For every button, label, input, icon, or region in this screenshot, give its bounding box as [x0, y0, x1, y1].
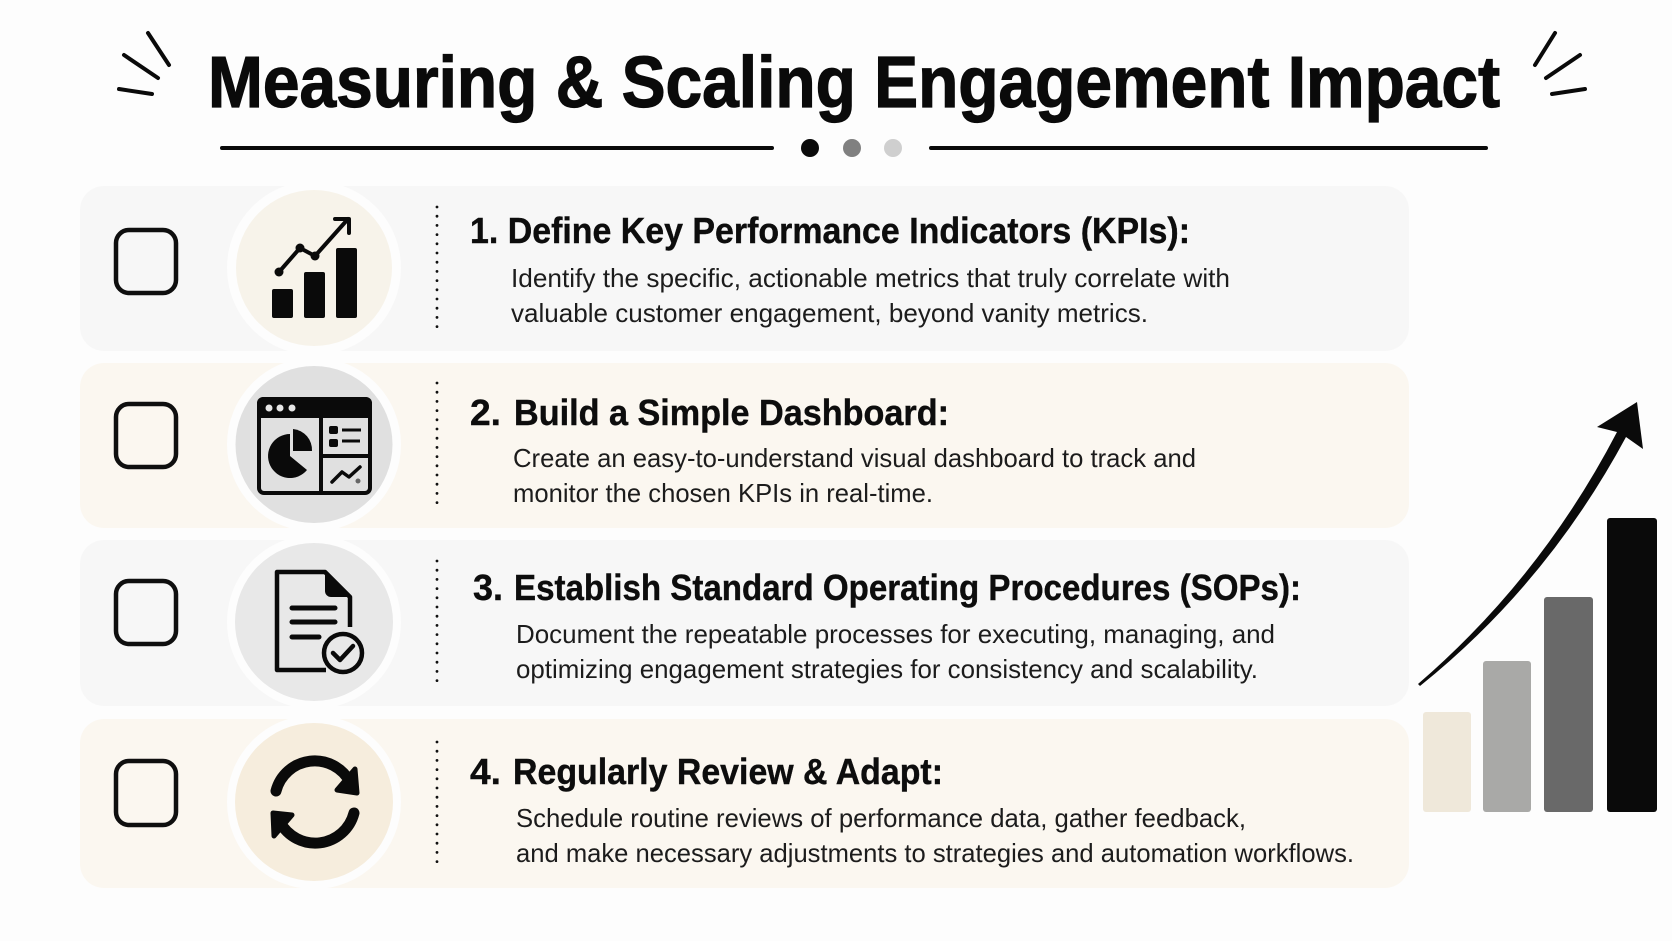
panel 3 icon: document with check: [227, 535, 401, 709]
panel 3 dotted separator: [436, 561, 438, 684]
panel 4 body: and make necessary adjustments to strategies and automation workflows.: [516, 838, 1354, 868]
panel 1 checkbox: [116, 230, 176, 293]
panel 2 body: Create an easy-to-understand visual dashboard to track and: [513, 443, 1196, 473]
panel 1 body: valuable customer engagement, beyond vanity metrics.: [511, 298, 1148, 328]
growth arrow: [1418, 402, 1643, 686]
panel 1 background: [80, 186, 1409, 351]
panel 4 icon: refresh arrows: [227, 715, 401, 889]
panel 3 body: Document the repeatable processes for executing, managing, and: [516, 619, 1275, 649]
title divider with dots: [220, 139, 1488, 157]
panel 2 body: [513, 443, 1196, 508]
panel 3 body: optimizing engagement strategies for consistency and scalability.: [516, 654, 1258, 684]
panel 4 heading: Regularly Review & Adapt:: [513, 751, 943, 792]
panel 1 body: [511, 263, 1230, 328]
panel 3: establish SOPs: [80, 535, 1409, 709]
panel 1 icon: bar chart with trend arrow: [227, 181, 401, 355]
left burst accent: [119, 33, 169, 94]
panel 3 heading: Establish Standard Operating Procedures (SOPs):: [514, 567, 1301, 608]
panel 1 dotted separator: [436, 207, 438, 331]
panel 4 checkbox: [116, 761, 176, 825]
panel 4 heading: 4.: [470, 751, 501, 792]
panel 2 body: monitor the chosen KPIs in real-time.: [513, 478, 933, 508]
panel 2 heading: Build a Simple Dashboard:: [514, 392, 949, 433]
panel 2: build dashboard: [80, 358, 1409, 532]
panel 2 icon: dashboard window: [227, 358, 401, 532]
panel 3 body: [516, 619, 1275, 684]
panel 2 checkbox: [116, 404, 176, 467]
growth chart: [1418, 402, 1657, 812]
right burst accent: [1535, 33, 1585, 94]
title: Measuring & Scaling Engagement Impact: [208, 43, 1500, 123]
growth bars: [1423, 518, 1657, 812]
panel 4: review and adapt: [80, 715, 1409, 889]
panel 4 background: [80, 719, 1409, 888]
panel 1: define KPIs: [80, 181, 1409, 355]
panel 3 background: [80, 540, 1409, 706]
panel 1 heading: 1. Define Key Performance Indicators (KPIs):: [470, 210, 1190, 251]
panel 3 checkbox: [116, 581, 176, 644]
panel 2 background: [80, 363, 1409, 528]
panel 3 heading: 3.: [473, 567, 503, 608]
panel 4 body: [516, 803, 1354, 868]
panel 2 heading: 2.: [470, 392, 501, 433]
panel 1 body: Identify the specific, actionable metrics that truly correlate with: [511, 263, 1230, 293]
panel 4 dotted separator: [436, 742, 438, 865]
panel 2 dotted separator: [436, 383, 438, 507]
panel 4 body: Schedule routine reviews of performance data, gather feedback,: [516, 803, 1246, 833]
